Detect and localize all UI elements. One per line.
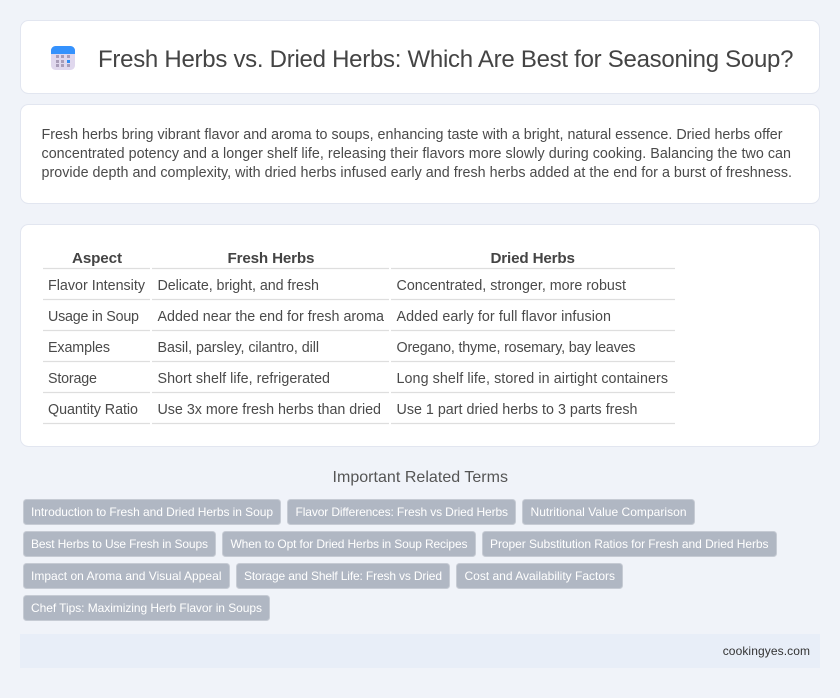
text block: introduction paragraph: concentrated potency and a longer shelf life, releasing their flavors more slowly during cooking. Balancing the two can bbox=[42, 146, 791, 162]
text block: introduction paragraph: Fresh herbs bring vibrant flavor and aroma to soups, enhancing taste with a bright, natural essence. Dried herbs offer bbox=[42, 127, 783, 143]
table row: examples: Oregano, thyme, rosemary, bay leaves bbox=[396, 340, 636, 356]
table row: storage: Short shelf life, refrigerated bbox=[158, 371, 330, 387]
tag: storage and shelf life bbox=[236, 564, 450, 588]
table row: usage in soup bbox=[43, 309, 675, 330]
tag: introduction bbox=[24, 500, 280, 524]
table row: examples: Basil, parsley, cilantro, dill bbox=[158, 340, 319, 356]
footer bbox=[20, 634, 820, 668]
table row: storage bbox=[43, 371, 675, 392]
tag: cost and availability: Cost and Availability Factors bbox=[464, 569, 615, 583]
table row: usage in soup: Added early for full flavor infusion bbox=[396, 309, 611, 325]
table header row: Aspect bbox=[72, 250, 122, 267]
title: Fresh Herbs vs. Dried Herbs: Which Are Best for Seasoning Soup? bbox=[98, 46, 794, 73]
tag: best herbs fresh: Best Herbs to Use Fresh in Soups bbox=[31, 537, 208, 551]
table header row: Dried Herbs bbox=[490, 250, 575, 267]
table row: flavor intensity: Flavor Intensity bbox=[48, 278, 146, 294]
table row: examples bbox=[43, 340, 675, 362]
table row: usage in soup: Added near the end for fresh aroma bbox=[158, 309, 384, 325]
tag: storage and shelf life: Storage and Shelf Life: Fresh vs Dried bbox=[244, 569, 442, 583]
tag: introduction: Introduction to Fresh and Dried Herbs in Soup bbox=[31, 505, 273, 519]
table row: flavor intensity: Concentrated, stronger, more robust bbox=[396, 278, 626, 294]
tag: flavor differences: Flavor Differences: Fresh vs Dried Herbs bbox=[296, 505, 508, 519]
tag: nutritional value bbox=[522, 500, 694, 524]
table row: quantity ratio: Use 1 part dried herbs to 3 parts fresh bbox=[396, 402, 638, 418]
text block: introduction paragraph bbox=[42, 127, 792, 181]
table header row: Fresh Herbs bbox=[228, 250, 314, 267]
table row: quantity ratio: Quantity Ratio bbox=[48, 402, 138, 418]
table header row bbox=[43, 250, 675, 268]
tag: when to opt for dried: When to Opt for Dried Herbs in Soup Recipes bbox=[230, 537, 468, 551]
text block: introduction paragraph: provide depth and complexity, with dried herbs infused early and fresh herbs added at the end for a burst of freshness. bbox=[42, 165, 792, 181]
icon: calendar bbox=[51, 46, 75, 70]
table row: quantity ratio: Use 3x more fresh herbs than dried bbox=[158, 402, 381, 418]
footer source text: cookingyes.com bbox=[723, 644, 810, 658]
table row: storage: Long shelf life, stored in airtight containers bbox=[396, 371, 668, 387]
table row: quantity ratio bbox=[43, 402, 675, 424]
table row: usage in soup: Usage in Soup bbox=[48, 309, 139, 325]
tag: best herbs fresh bbox=[24, 532, 216, 556]
table row: flavor intensity bbox=[43, 278, 675, 300]
heading: important related terms: Important Related Terms bbox=[332, 469, 508, 486]
panel: related term tags bbox=[24, 500, 776, 620]
tag: chef tips bbox=[24, 596, 270, 620]
tag: cost and availability bbox=[456, 564, 622, 588]
tag: substitution ratios bbox=[482, 532, 776, 556]
tag: nutritional value: Nutritional Value Comparison bbox=[530, 505, 686, 519]
tag: aroma and visual appeal bbox=[24, 564, 230, 588]
table row: flavor intensity: Delicate, bright, and fresh bbox=[158, 278, 319, 294]
panel: comparison table bbox=[20, 224, 820, 446]
tag: when to opt for dried bbox=[222, 532, 476, 556]
table row: examples: Examples bbox=[48, 340, 110, 356]
table row: storage: Storage bbox=[48, 371, 97, 387]
tag: chef tips: Chef Tips: Maximizing Herb Flavor in Soups bbox=[31, 601, 262, 615]
tag: aroma and visual appeal: Impact on Aroma and Visual Appeal bbox=[31, 569, 222, 583]
tag: substitution ratios: Proper Substitution Ratios for Fresh and Dried Herbs bbox=[490, 537, 768, 551]
tag: flavor differences bbox=[288, 500, 516, 524]
panel: title card bbox=[20, 20, 820, 94]
panel: introduction bbox=[20, 104, 820, 204]
